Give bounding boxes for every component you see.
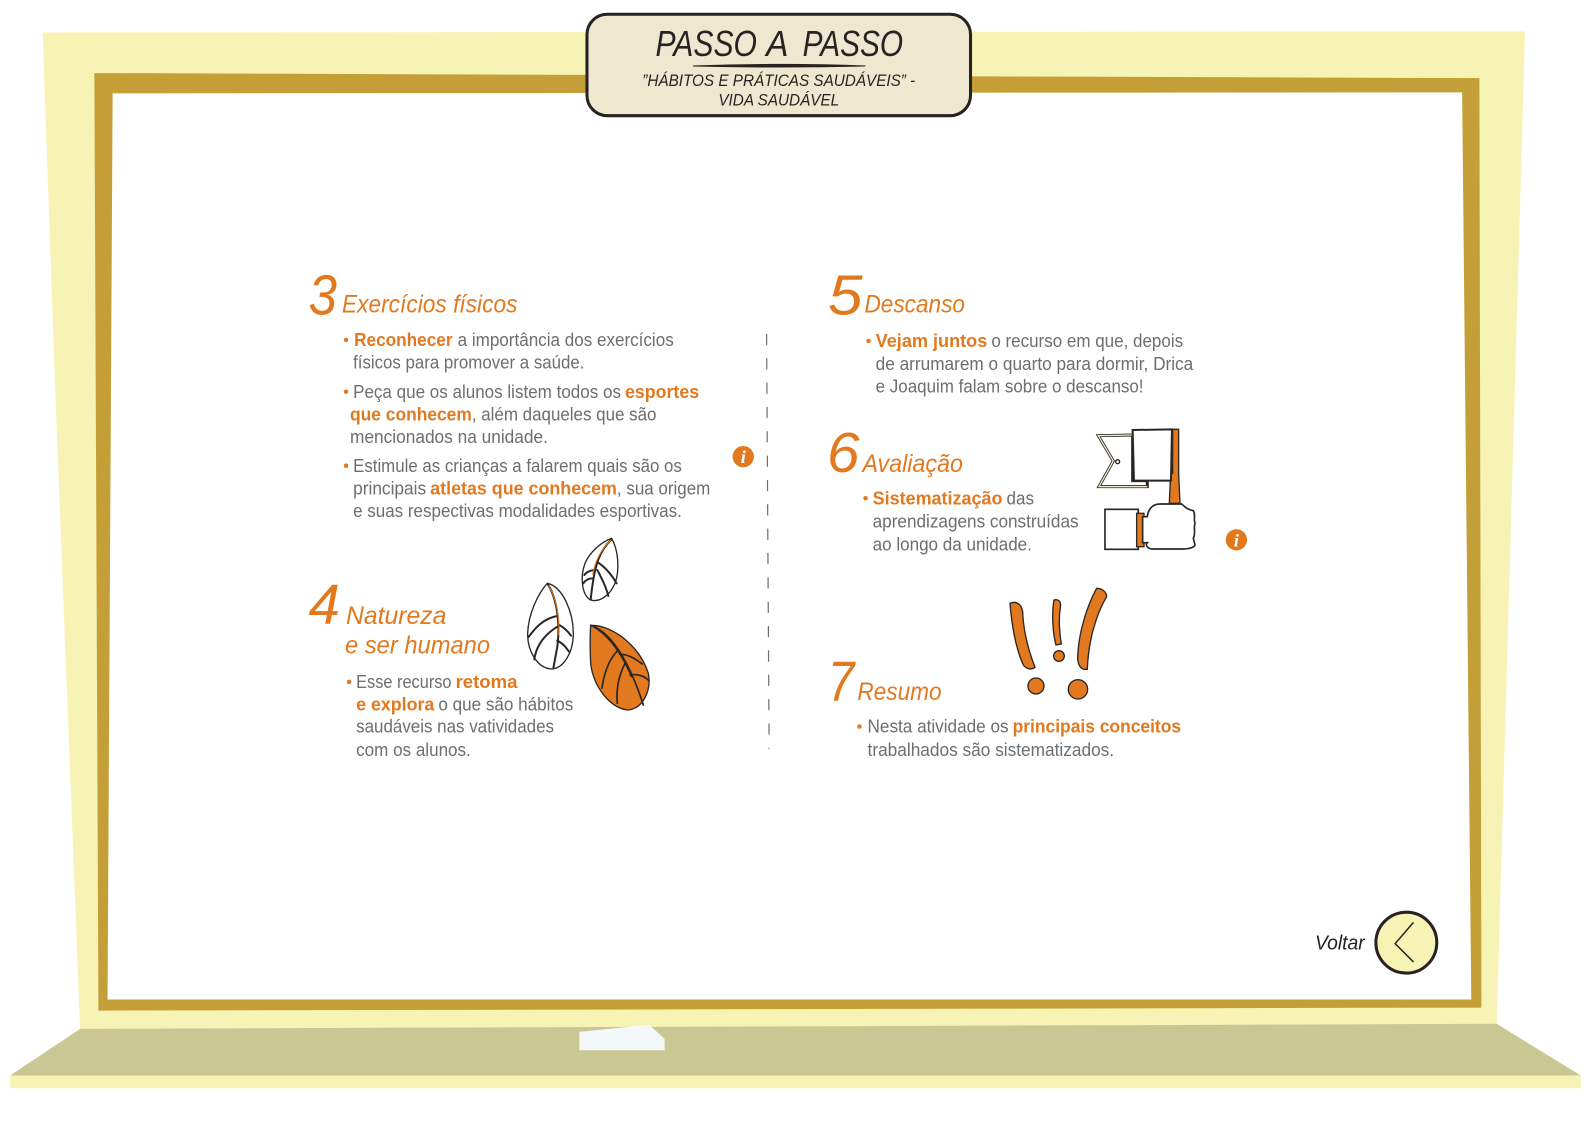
sleeve	[1105, 509, 1138, 549]
bullet: vejam juntos: Vejam juntos	[876, 330, 987, 351]
bullet: atletas: , sua origem	[617, 478, 710, 499]
bullet: vejam juntos	[866, 330, 1194, 397]
bullet: esportes: esportes	[625, 381, 699, 402]
cuff	[1137, 513, 1144, 547]
number 7: 7	[828, 651, 856, 714]
title underline	[693, 64, 866, 67]
number 6: 6	[827, 422, 860, 485]
bullet: vejam juntos: o recurso em que, depois	[991, 330, 1183, 351]
icon: info	[1226, 529, 1247, 550]
leaf: left	[528, 583, 573, 669]
bullet: retoma: retoma	[456, 671, 518, 692]
icon: leaves	[528, 538, 649, 710]
title	[655, 23, 903, 64]
icon: exclamation marks	[1010, 588, 1107, 699]
subtitle	[642, 71, 916, 110]
bullet: atletas: Estimule as crianças a falarem quais são os	[353, 455, 682, 476]
bullet: atletas: e suas respectivas modalidades esportivas.	[353, 500, 682, 521]
title: A	[764, 23, 788, 64]
bullet: vejam juntos: e Joaquim falam sobre o descanso!	[876, 376, 1144, 397]
title: PASSO	[803, 23, 903, 64]
heading 4: Natureza	[346, 602, 446, 630]
back button	[1315, 912, 1437, 973]
bullet: sistematização: das	[1007, 487, 1034, 508]
bullet: principais conceitos: Nesta atividade os	[868, 716, 1009, 737]
bullet: retoma: com os alunos.	[356, 739, 471, 760]
bullet: sistematização: ao longo da unidade.	[873, 533, 1032, 554]
leaf: top	[582, 538, 618, 601]
bullet: sistematização: Sistematização	[873, 487, 1002, 508]
section 7: resumo	[828, 651, 1181, 760]
chalk piece	[579, 1025, 665, 1050]
icon: info	[733, 446, 754, 467]
heading 7: Resumo	[857, 678, 942, 706]
section 6: avaliação	[827, 422, 1079, 554]
bullet: retoma: e explora	[356, 693, 435, 714]
bullet: esportes: mencionados na unidade.	[350, 426, 548, 447]
back chevron	[1395, 922, 1413, 962]
bullet: atletas	[344, 455, 710, 521]
bullet: esportes	[344, 381, 699, 447]
title: PASSO	[655, 23, 757, 64]
section 3: exercícios físicos	[308, 265, 710, 521]
icon: info: i	[741, 447, 746, 467]
bullet: retoma: Esse recurso	[356, 671, 452, 692]
icon: hand holding flag	[1098, 429, 1195, 549]
back circle	[1376, 912, 1437, 973]
bullet: vejam juntos: de arrumarem o quarto para dormir, Drica	[876, 353, 1194, 374]
subtitle: ”HÁBITOS E PRÁTICAS SAUDÁVEIS” -	[642, 71, 916, 90]
bullet: esportes: , além daqueles que são	[472, 404, 656, 425]
section 4: natureza e ser humano	[308, 574, 573, 760]
section 5: descanso	[828, 265, 1194, 397]
heading 4: e ser humano	[345, 631, 490, 659]
number 5: 5	[828, 265, 863, 328]
chalk tray	[10, 1024, 1581, 1088]
bullet: atletas: principais	[353, 478, 426, 499]
heading 3: Exercícios físicos	[342, 291, 518, 319]
bullet: sistematização	[863, 487, 1079, 554]
bullet: retoma: saudáveis nas vatividades	[356, 716, 554, 737]
bullet: esportes: que conhecem	[350, 404, 472, 425]
flag banner	[1098, 435, 1147, 487]
bullet: esportes: Peça que os alunos listem todos os	[353, 381, 621, 402]
back label: Voltar	[1315, 933, 1366, 955]
bullet: retoma	[347, 671, 573, 760]
bullet: reconhecer: a importância dos exercícios	[458, 329, 674, 350]
fist	[1143, 504, 1195, 549]
leaf: orange	[590, 625, 649, 710]
number 4: 4	[308, 574, 340, 637]
subtitle: VIDA SAUDÁVEL	[718, 91, 839, 110]
flag panel	[1133, 429, 1172, 481]
heading 6: Avaliação	[861, 450, 963, 478]
bullet: principais conceitos: principais conceitos	[1013, 716, 1181, 737]
title plate	[587, 14, 971, 116]
heading 4	[345, 602, 490, 659]
heading 5: Descanso	[864, 291, 965, 319]
bullet: principais conceitos	[857, 716, 1181, 760]
number 3: 3	[308, 265, 337, 328]
bullet: atletas: atletas que conhecem	[430, 478, 617, 499]
flag pole	[1169, 429, 1180, 503]
bullet: reconhecer: Reconhecer	[354, 329, 453, 350]
bullet: principais conceitos: trabalhados são sistematizados.	[868, 739, 1114, 760]
bullet: reconhecer	[344, 329, 674, 372]
bullet: retoma: o que são hábitos	[438, 693, 573, 714]
bullet: sistematização: aprendizagens construídas	[873, 511, 1079, 532]
icon: info: i	[1234, 530, 1239, 550]
dashed divider	[767, 334, 769, 749]
bullet: reconhecer: físicos para promover a saúde.	[353, 351, 584, 372]
